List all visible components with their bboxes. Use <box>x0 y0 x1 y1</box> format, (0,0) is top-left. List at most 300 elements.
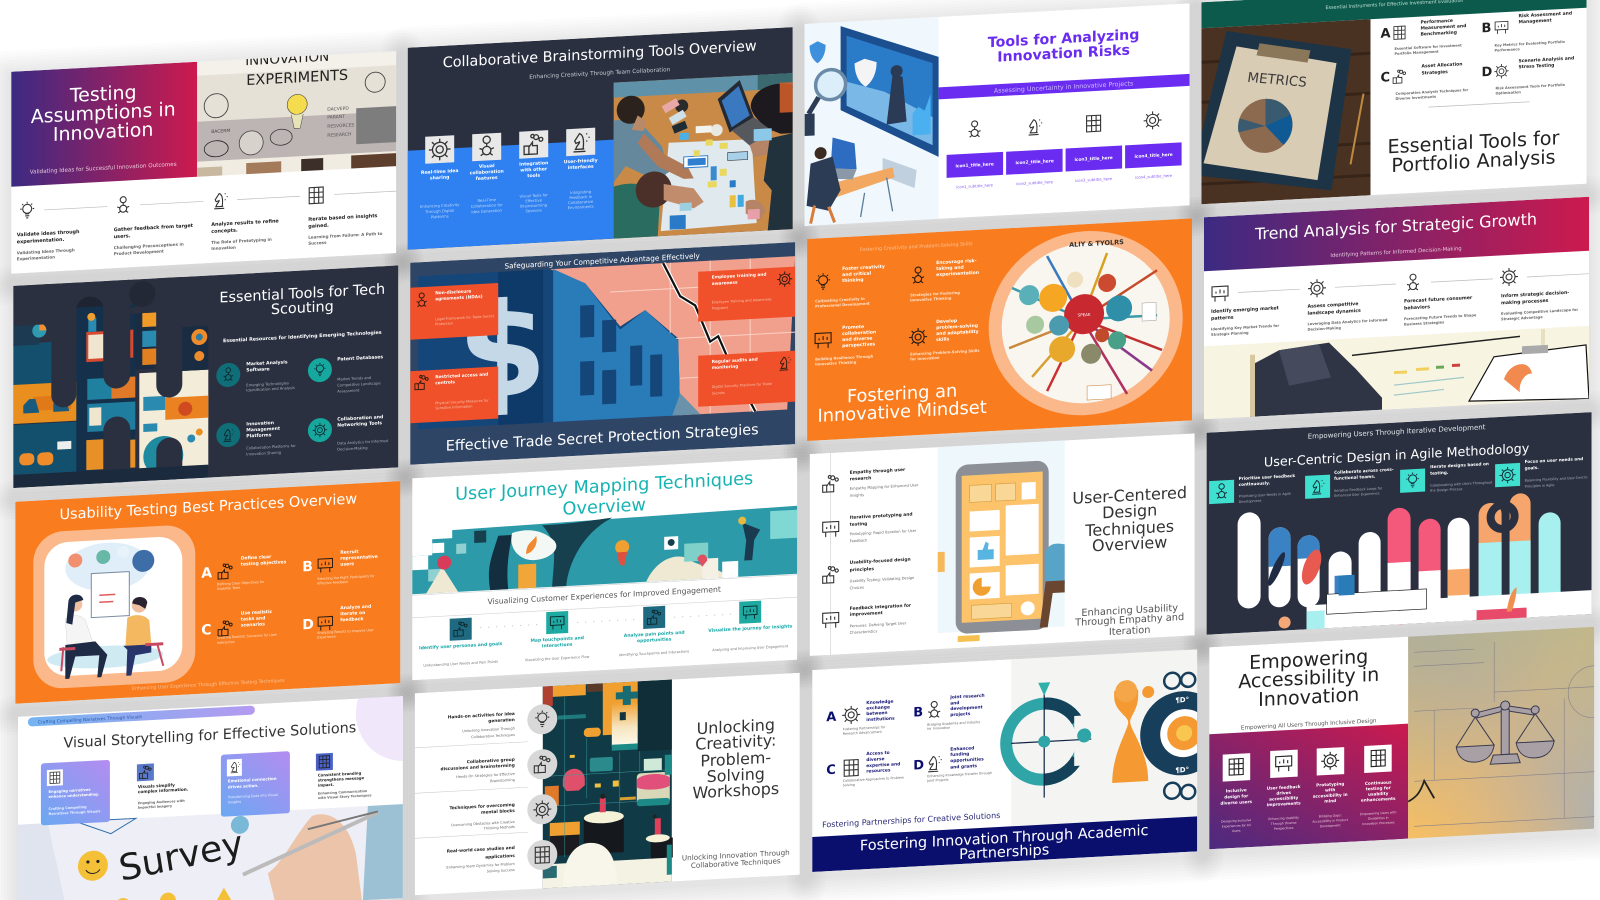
feature 3: Bridging Gaps: <box>1319 813 1342 818</box>
item C: resources <box>866 767 891 775</box>
item D: Stress Testing <box>1519 62 1554 70</box>
feature 2: improvements <box>1267 800 1301 807</box>
panel: Fostering Innovation Through Academic Partnerships <box>812 648 1224 872</box>
image: experiments sketch: DACVEPD <box>327 106 349 113</box>
feature 3: Visual Tools for <box>520 192 548 199</box>
panel: Usability Testing Best Practices <box>15 481 400 704</box>
step 4: applications <box>485 853 515 861</box>
item 4 <box>909 317 980 362</box>
image: journey map <box>412 506 797 594</box>
item B: Selecting the Right Participants for <box>317 574 375 581</box>
item C: expertise and <box>866 761 900 769</box>
image: survey form and hand <box>18 804 403 900</box>
step 4: Solving Success <box>487 868 515 873</box>
title: Solving <box>707 764 765 786</box>
title: Innovation Risks <box>997 43 1130 66</box>
kicker: Safeguarding Your Competitive Advantage Effectively <box>505 251 701 271</box>
callout 1: Legal Framework for Trade Secret <box>435 314 495 321</box>
feature 2: Visual <box>479 163 495 170</box>
item B: representative <box>340 554 378 562</box>
item 2: Encourage risk- <box>936 258 977 266</box>
item C: C <box>826 763 836 778</box>
panel: Unlocking Creativity Workshops <box>415 673 800 895</box>
step 1: Collaborative Techniques <box>471 733 515 739</box>
callout 4: Regular audits and <box>712 357 758 365</box>
feature 1: design for <box>1224 793 1249 799</box>
step 2 <box>441 748 557 786</box>
callout 1 <box>410 283 498 340</box>
technique 2: Prototyping: Rapid Iteration for User <box>850 529 917 536</box>
subtitle: Enhancing Usability <box>1081 603 1178 619</box>
step 1 <box>419 616 503 668</box>
callout 3: Employee training and <box>712 272 766 281</box>
feature 3: Prototyping <box>1316 781 1344 788</box>
feature 1: diverse users <box>1220 799 1253 806</box>
tool: innovation management: Management <box>246 426 281 434</box>
item A: institutions <box>866 716 895 723</box>
technique 4 <box>823 603 912 636</box>
item B: users <box>340 561 354 568</box>
item 3: Innovation <box>211 245 236 251</box>
item A: exchange <box>866 704 890 712</box>
item A <box>201 553 287 592</box>
item B <box>1482 10 1572 53</box>
feature 2: Perspectives <box>1274 826 1294 831</box>
item C: Creating Realistic Scenarios for User <box>217 633 277 640</box>
icon: network <box>1500 268 1518 286</box>
tool: collaboration networks <box>308 414 388 453</box>
item 4: for Innovation <box>910 356 940 361</box>
item A: Knowledge <box>866 699 894 706</box>
image: building and falling chart <box>418 256 795 431</box>
callout 4: Secrets <box>712 391 725 396</box>
image: experiments sketch: BACERM <box>211 128 230 135</box>
item 3: collaboration <box>842 329 876 337</box>
feature 3: with other <box>520 166 548 174</box>
item B: Effective Feedback <box>317 580 349 586</box>
feature 1: Inclusive <box>1226 787 1247 793</box>
callout 2 <box>410 366 498 423</box>
item 3: Forecast future consumer <box>1404 295 1473 305</box>
tool: innovation management: Innovation Sharing <box>246 451 281 457</box>
item D <box>302 603 374 640</box>
image: risk analysis illustration <box>805 17 939 226</box>
icon: case <box>1212 286 1228 302</box>
feature 4: Environments <box>568 204 594 210</box>
step 4: Enhancing Team Dynamics for Problem <box>446 862 515 870</box>
tool: collaboration networks: Networking Tools <box>337 420 382 429</box>
item 3: The Role of Prototyping in <box>211 237 272 245</box>
card 1: Engaging narratives <box>48 788 91 794</box>
callout 1: Protection <box>435 321 453 326</box>
card 3 <box>1066 114 1122 184</box>
title: User Journey Mapping Techniques <box>455 469 753 505</box>
item D <box>913 744 992 784</box>
card 1: icon1_title_here <box>955 161 994 169</box>
feature 2: functional teams. <box>1334 474 1376 481</box>
icon: knight <box>214 193 227 209</box>
image: mind map circle: SPEAK <box>1078 312 1091 318</box>
item D: Enhanced <box>950 745 974 753</box>
feature 4: Empowering Users with <box>1360 810 1396 816</box>
item 1: Strategic Planning <box>1211 331 1249 337</box>
panel: User-Centered Design Techniques <box>810 433 1195 656</box>
item C <box>201 609 277 646</box>
item C: Strategies <box>1422 69 1448 77</box>
subtitle: Enhancing Creativity Through Team Collaboration <box>529 67 671 81</box>
item B: Recruit <box>340 549 359 556</box>
item 1: experimentation. <box>17 237 65 245</box>
callout 2: Physical Security Measures for <box>435 398 489 405</box>
item A: testing objectives <box>241 559 287 568</box>
feature 4: Collaborative <box>568 199 594 205</box>
item C: tasks and <box>241 615 265 623</box>
item 1: patterns <box>1211 315 1234 322</box>
item B: and <box>950 700 959 707</box>
step 3: Overcoming Obstacles with Creative <box>451 820 515 827</box>
step 3: Thinking Methods <box>483 825 515 831</box>
item A: Fostering Partnerships for <box>843 725 886 731</box>
tool: market analysis: Emerging Technologies <box>246 381 289 388</box>
subtitle: Collaborative Techniques <box>691 856 781 870</box>
item 4: Learning from Failure: A Path to <box>308 231 383 240</box>
item 1: Cultivating Creativity in <box>815 297 865 304</box>
timeline <box>20 186 396 218</box>
title: Collaborative Brainstorming Tools Overview <box>443 39 757 71</box>
card 1: enhance understanding. <box>48 792 100 799</box>
image: experiments sketch: RESVORCES <box>327 122 354 130</box>
feature 3 <box>1312 747 1349 829</box>
title band: Fostering Innovation Through Academic <box>860 823 1148 854</box>
feature 1: Through Digital <box>424 208 454 214</box>
card 4: icon4_subtitle_here <box>1135 173 1173 180</box>
image: gears and hourglass <box>1006 648 1224 827</box>
technique 3: Usability Testing: Validating Design <box>850 576 915 583</box>
item 1: Foster creativity <box>842 264 885 272</box>
item 1: Validate ideas through <box>17 229 80 238</box>
image: experiments sketch: EXPERIMENTS <box>246 68 348 89</box>
feature 3: Collaborating with Users Throughout <box>1430 480 1493 488</box>
step 3: mental blocks <box>481 808 515 816</box>
item A: Usability Tests <box>217 586 241 591</box>
item 3: behaviors <box>1404 304 1430 312</box>
card 3: Insights <box>228 800 241 804</box>
item D: Analyzing Results to Improve User <box>317 628 374 635</box>
item C: Asset Allocation <box>1422 61 1462 70</box>
feature 1: Enhancing Creativity <box>420 202 460 209</box>
item 2: Gather feedback from target <box>114 223 194 233</box>
tool: patent databases: Assessment <box>337 388 360 394</box>
item 3: perspectives <box>842 341 875 349</box>
title: Trend Analysis for Strategic Growth <box>1254 209 1537 244</box>
item B <box>913 693 985 732</box>
item 3: and diverse <box>842 336 872 343</box>
item 2: Decision-Making <box>1308 326 1341 332</box>
item D: opportunities <box>950 756 984 764</box>
item 3: Innovative Thinking <box>815 360 857 367</box>
callout 4: Digital Security Practices for Trade <box>712 382 772 389</box>
panel: Empowering Accessibility in Innovation <box>1209 625 1600 849</box>
feature 3: Development <box>1320 823 1341 828</box>
feature 3: Brainstorming <box>520 202 548 209</box>
title: Workshops <box>692 779 779 802</box>
tool: market analysis <box>216 359 295 394</box>
item 1: and critical <box>842 271 871 278</box>
item C: diverse <box>866 756 884 763</box>
feature 3 <box>1400 461 1493 494</box>
item B: for Innovation <box>927 726 950 731</box>
feature 4: interfaces <box>568 164 594 171</box>
feature 1: Real-time idea <box>421 168 458 176</box>
callout 1: Non-disclosure <box>435 288 471 296</box>
step 4: Visualize the journey for insights <box>708 623 793 634</box>
feature 4: Innovation Processes <box>1362 820 1395 826</box>
feature 3: Iterate designs based on <box>1430 461 1489 469</box>
feature 1: sharing <box>430 174 449 182</box>
card 3: Emotional connection <box>228 776 277 783</box>
feature 3: testing. <box>1430 470 1449 476</box>
panel: Effective Trade Secret Protection <box>410 242 795 465</box>
item A: Defining Clear Objectives for <box>217 580 265 586</box>
item 1 <box>815 264 885 309</box>
card 4: icon4_title_here <box>1134 152 1173 160</box>
feature 4: testing for <box>1366 785 1392 791</box>
tool: patent databases <box>308 354 383 395</box>
technique 2 <box>823 511 917 545</box>
item 4 <box>308 213 383 246</box>
step 2: Hands-On Strategies for Effective <box>456 772 515 779</box>
icon: grid <box>309 187 323 204</box>
item 4: gained. <box>308 223 329 230</box>
item 3 <box>1404 295 1477 327</box>
item C: scenarios <box>241 621 265 629</box>
feature 1 <box>420 135 460 220</box>
technique 4: Feedback integration for <box>850 603 912 612</box>
item 4: Inform strategic decision- <box>1501 290 1569 299</box>
tool: market analysis: Identification and Analysis <box>246 386 295 393</box>
item 2: Engaging Audiences with <box>138 799 185 805</box>
image: team at table <box>614 73 793 239</box>
item 2 <box>1308 299 1388 332</box>
subtitle: Empowering All Users Through Inclusive Design <box>1241 718 1377 732</box>
step 1: Unlocking Innovation Through <box>462 726 515 733</box>
panel: Testing Assumptions in Innovation <box>11 45 396 274</box>
image: experiments sketch: PARANT <box>327 114 345 121</box>
item A: A <box>1381 26 1391 42</box>
card 2: icon2_subtitle_here <box>1016 179 1054 186</box>
item 4: Evaluating Competitive Landscape for <box>1501 308 1578 316</box>
purple band <box>939 74 1190 99</box>
subtitle: Identifying Patterns for Informed Decision-Making <box>1330 246 1462 259</box>
feature 2: Enhanced User Experience <box>1334 491 1380 498</box>
title: Techniques <box>1084 517 1174 540</box>
image: colourful tech collage <box>13 266 208 492</box>
title: User-Centered <box>1072 483 1187 508</box>
title: Portfolio Analysis <box>1391 145 1556 177</box>
title band: Partnerships <box>959 842 1049 863</box>
item D: feedback <box>340 616 364 623</box>
item B: B <box>302 559 313 575</box>
card 3: Transforming Data into Visual <box>227 793 278 800</box>
technique 1: Empathy Mapping for Enhanced User <box>850 483 919 491</box>
item A: A <box>201 565 212 582</box>
item D: Optimization <box>1496 90 1521 96</box>
item D: funding <box>950 751 969 758</box>
image: arched columns illustration <box>1238 490 1592 634</box>
feature 3: the Design Process <box>1430 487 1463 493</box>
item 2: Innovative Thinking <box>910 296 952 302</box>
step 3: Identifying Touchpoints and Interactions <box>619 649 689 657</box>
step 3: Techniques for overcoming <box>450 802 515 811</box>
icon: bulb <box>20 201 34 218</box>
card 4 <box>1125 110 1182 180</box>
item B <box>302 548 378 586</box>
tool: market analysis: Software <box>246 366 270 374</box>
feature 2: Real-Time <box>477 197 497 203</box>
tool: collaboration networks: Collaboration and <box>337 414 383 423</box>
item C: Access to <box>866 750 890 757</box>
subtitle: Iteration <box>1109 625 1150 638</box>
image: metrics clipboard <box>1192 19 1370 205</box>
item D: Scenario Analysis and <box>1519 55 1574 64</box>
feature 1: Prioritize user feedback <box>1239 473 1295 481</box>
title band <box>812 816 1197 872</box>
feature 2: Enhancing Usability <box>1268 815 1299 821</box>
feature 3: Integration <box>519 160 548 168</box>
feature 3: Sessions <box>525 208 542 213</box>
item C <box>1380 61 1469 102</box>
feature 1 <box>1220 753 1253 834</box>
card 1 <box>947 119 1003 190</box>
item 4: and adaptability <box>936 329 979 337</box>
feature 4: Principles in Agile <box>1525 483 1555 489</box>
tool: innovation management: Platforms <box>246 432 272 440</box>
title: Innovation <box>1258 683 1359 711</box>
step 2 <box>525 610 589 662</box>
card 1: Crafting Compelling <box>48 805 87 811</box>
title: Tools for Analyzing <box>988 27 1139 51</box>
subtitle: Empowering Users Through Iterative Development <box>1308 423 1486 441</box>
technique 2: testing <box>850 521 867 528</box>
title: Creativity: <box>695 730 776 754</box>
feature 2 <box>1267 749 1301 831</box>
image: experiments sketch: INNOVATION <box>245 49 329 69</box>
feature 4: Continuous <box>1365 780 1392 786</box>
technique 2: Iterative prototyping and <box>850 512 913 521</box>
feature 2: User feedback <box>1267 784 1301 791</box>
item 3: Business Strategies <box>1404 320 1444 327</box>
tool: innovation management: Collaboration Platforms for <box>246 444 296 451</box>
step 1: Understanding User Needs and Pain Points <box>423 660 498 668</box>
item D: and grants <box>950 763 977 771</box>
feature 1: Experiences for All <box>1222 823 1251 829</box>
image: scales of justice <box>1408 625 1600 839</box>
panel: Fostering an Innovative Mindset <box>807 218 1192 441</box>
image: gears and hourglass: ¶D° <box>1175 766 1189 775</box>
item 2: Impactful Imagery <box>138 804 173 810</box>
subtitle: Through Empathy and <box>1074 612 1184 629</box>
title: User-Centric Design in Agile Methodology <box>1264 441 1530 471</box>
callout 4 <box>698 351 795 407</box>
item 4: Develop <box>936 318 958 325</box>
item 2: Leveraging Data Analytics for Informed <box>1308 318 1388 326</box>
item 2: Challenging Preconceptions in <box>114 241 184 250</box>
technique 1: Empathy through user <box>850 467 906 476</box>
feature 2: features <box>476 175 498 182</box>
subtitle: Visualizing Customer Experiences for Improved Engagement <box>488 585 721 606</box>
purple band: Assessing Uncertainty in Innovative Projects <box>994 80 1133 95</box>
item 4: Iterate based on insights <box>308 213 378 223</box>
feature 2: collaboration <box>470 169 504 176</box>
item 4: Strategic Advantage <box>1501 315 1543 321</box>
feature 3: Accessibility in Product <box>1312 818 1349 824</box>
item 2: users. <box>114 233 131 240</box>
item C: Use realistic <box>241 609 272 617</box>
card 2 <box>1006 118 1063 187</box>
title: Testing <box>69 82 137 107</box>
item C: Diverse Investments <box>1396 95 1436 101</box>
item 1: Validating Ideas Through <box>17 247 75 255</box>
feature 1: Users <box>1232 829 1241 833</box>
panel: Collaborative Brainstorming Tools <box>408 27 793 250</box>
feature 2: accessibility <box>1269 795 1298 802</box>
item 4: Consistent branding <box>318 770 362 778</box>
feature 3: tools <box>527 173 540 179</box>
item B: projects <box>950 711 971 718</box>
item 1: Professional Development <box>815 302 870 309</box>
item 2: complex information. <box>138 787 189 794</box>
title: Unlocking <box>697 715 775 738</box>
panel: Essential Tools for Portfolio Analysis <box>1192 0 1586 205</box>
subtitle: Essential Resources for Identifying Emerging Technologies <box>223 330 382 344</box>
feature 4 <box>1495 456 1588 490</box>
image: data city <box>543 679 673 888</box>
timeline <box>1212 264 1589 303</box>
subtitle: Fostering Creativity and Problem-Solving Skills <box>860 241 973 253</box>
item 2: Strategies for Fostering <box>910 291 960 297</box>
item B: development <box>950 704 983 712</box>
item B: B <box>913 705 923 721</box>
item 4: problem-solving <box>936 323 978 331</box>
item 2: Product Development <box>114 249 164 256</box>
title: Essential Tools for <box>1388 126 1560 158</box>
image: survey form and hand: Survey <box>116 823 246 890</box>
card 1: Narratives Through Visuals <box>48 809 101 816</box>
technique 4: Characteristics <box>850 629 877 635</box>
callout 3 <box>698 267 795 322</box>
title: Fostering an <box>847 380 957 407</box>
image: two researchers <box>33 524 195 690</box>
card 3 <box>221 751 290 817</box>
title: Innovation <box>53 119 153 146</box>
item 3: Promote <box>842 324 864 331</box>
item 4: skills <box>936 336 950 343</box>
item 1 <box>1211 305 1280 337</box>
item B: Risk Assessment and <box>1519 10 1572 19</box>
item D: Enhancing Knowledge Transfer through <box>927 771 992 778</box>
technique 2: Feedback <box>850 538 868 543</box>
callout 1: agreements (NDAs) <box>435 294 483 302</box>
feature 4: goals. <box>1525 465 1539 471</box>
feature 4: Focus on user needs and <box>1525 456 1583 464</box>
item B: Performance <box>1494 47 1520 53</box>
item 1 <box>17 229 80 261</box>
item A: between <box>866 710 888 717</box>
item B: Key Metrics for Evaluating Portfolio <box>1494 40 1566 48</box>
technique 1: Insights <box>850 493 864 498</box>
technique 1: research <box>850 475 871 482</box>
icon: person <box>1407 274 1419 290</box>
